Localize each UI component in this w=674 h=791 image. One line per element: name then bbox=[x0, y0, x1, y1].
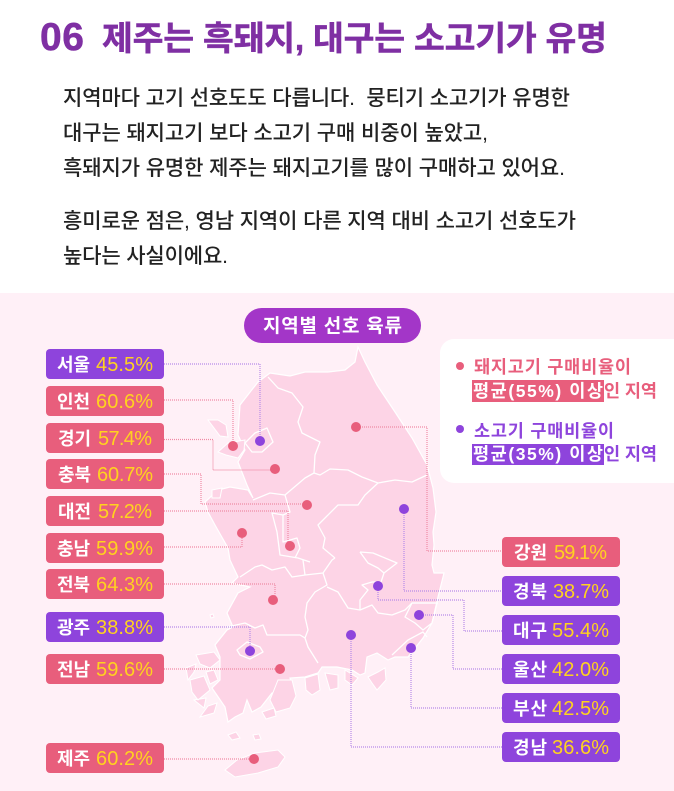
leader lines bbox=[164, 364, 502, 759]
label: 대구: 대구 bbox=[513, 621, 547, 641]
legend: beef: 평균(35%) 이상 bbox=[473, 444, 603, 464]
label: 강원 bbox=[502, 537, 620, 567]
label: 부산 bbox=[502, 693, 620, 723]
legend: pork: 돼지고기 구매비율이 bbox=[474, 357, 631, 377]
map of South Korea bbox=[186, 347, 444, 777]
label: 충북: 충북 bbox=[58, 465, 91, 485]
label: 충남 bbox=[46, 533, 164, 563]
label: 제주 bbox=[46, 743, 164, 773]
legend: pork bbox=[456, 357, 657, 402]
label: 서울: 45.5% bbox=[96, 354, 153, 376]
label: 경남: 36.6% bbox=[552, 737, 609, 759]
label: 전북: 전북 bbox=[57, 575, 90, 595]
label: 강원: 59.1% bbox=[554, 542, 607, 564]
legend panel bbox=[440, 339, 674, 483]
label: 충북: 60.7% bbox=[97, 464, 153, 486]
label: 제주: 60.2% bbox=[96, 748, 153, 770]
legend: pork: 평균(55%) 이상 bbox=[473, 381, 603, 401]
label: 광주: 38.8% bbox=[96, 617, 153, 639]
label: 울산 bbox=[502, 654, 620, 684]
intro text block: 지역마다 고기 선호도도 다릅니다. 뭉티기 소고기가 유명한 bbox=[63, 87, 570, 110]
panel: regional preference background bbox=[0, 293, 674, 791]
label: 전북 bbox=[46, 569, 164, 599]
label: 전남: 전남 bbox=[57, 660, 90, 680]
intro text block: 높다는 사실이에요. bbox=[63, 245, 228, 268]
label: 서울: 서울 bbox=[57, 355, 90, 375]
label: 대구: 55.4% bbox=[552, 620, 609, 642]
label: 경북 bbox=[502, 576, 620, 606]
label: 경기: 57.4% bbox=[98, 428, 152, 450]
label: 강원: 강원 bbox=[514, 543, 547, 563]
label: 인천: 인천 bbox=[57, 392, 90, 412]
label: 대전 bbox=[46, 496, 164, 526]
label: 서울 bbox=[46, 349, 164, 379]
label: 충남: 충남 bbox=[57, 539, 90, 559]
heading pill: 지역별 선호 육류 bbox=[263, 315, 402, 337]
label: 광주 bbox=[46, 612, 164, 642]
label: 부산: 부산 bbox=[513, 699, 547, 719]
label: 대전: 대전 bbox=[58, 502, 91, 522]
label: 제주: 제주 bbox=[57, 749, 90, 769]
label: 경남: 경남 bbox=[513, 738, 547, 758]
heading pill bbox=[244, 308, 421, 343]
legend: beef: 인 지역 bbox=[604, 444, 657, 464]
legend: pork: 인 지역 bbox=[604, 381, 657, 401]
map dots bbox=[228, 422, 424, 764]
label: 경북: 38.7% bbox=[553, 581, 609, 603]
label: 울산: 울산 bbox=[513, 660, 547, 680]
legend: beef: 소고기 구매비율이 bbox=[474, 421, 614, 441]
intro text block: 흥미로운 점은, 영남 지역이 다른 지역 대비 소고기 선호도가 bbox=[63, 210, 576, 233]
label: 전북: 64.3% bbox=[96, 574, 153, 596]
label: 경북: 경북 bbox=[513, 582, 547, 602]
intro text block: 흑돼지가 유명한 제주는 돼지고기를 많이 구매하고 있어요. bbox=[63, 157, 565, 180]
label: 경기: 경기 bbox=[58, 429, 91, 449]
intro text block bbox=[63, 87, 576, 268]
label: 인천 bbox=[46, 386, 164, 416]
title: 제주는 흑돼지, 대구는 소고기가 유명 bbox=[102, 21, 607, 58]
intro text block: 대구는 돼지고기 보다 소고기 구매 비중이 높았고, bbox=[63, 122, 488, 145]
map: Jeju island bbox=[225, 750, 285, 777]
map: region borders bbox=[227, 377, 438, 663]
label: 충남: 59.9% bbox=[96, 538, 153, 560]
map: islands bbox=[186, 420, 386, 740]
label: 대전: 57.2% bbox=[98, 501, 152, 523]
legend: beef bbox=[456, 421, 657, 465]
label: 광주: 광주 bbox=[57, 618, 90, 638]
label: 부산: 42.5% bbox=[552, 698, 609, 720]
label: 인천: 60.6% bbox=[96, 391, 153, 413]
title: 06 bbox=[40, 16, 84, 59]
label: 울산: 42.0% bbox=[552, 659, 609, 681]
label: 대구 bbox=[502, 615, 620, 645]
label: 전남: 59.6% bbox=[96, 659, 153, 681]
label: 충북 bbox=[46, 459, 164, 489]
label: 경기 bbox=[46, 423, 164, 453]
label: 경남 bbox=[502, 732, 620, 762]
label: 전남 bbox=[46, 654, 164, 684]
